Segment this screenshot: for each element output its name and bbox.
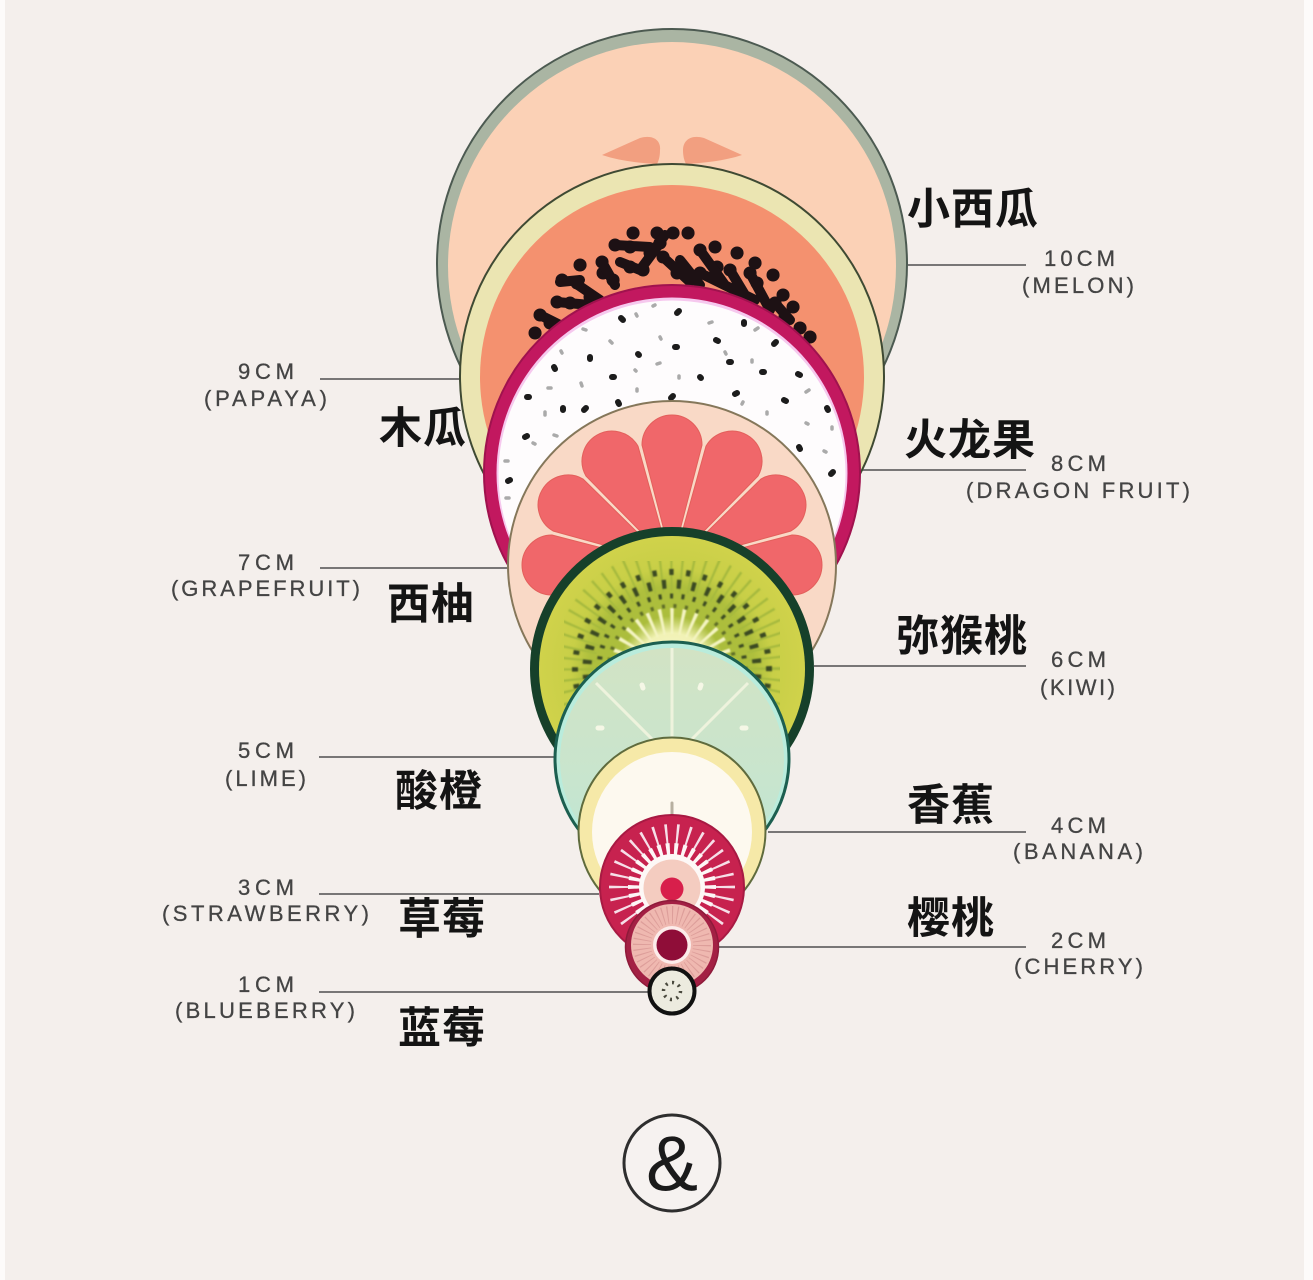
banana stem mark [670,803,674,814]
icon: ampersand logo: & [646,1119,698,1207]
label: lime [225,738,483,816]
label: strawberry [162,875,486,944]
label: kiwi: 弥猴桃 [896,613,1028,661]
label: dragon fruit [904,417,1190,503]
label: grapefruit [171,550,475,629]
label: melon: (MELON) [1022,273,1134,298]
label: dragon fruit: 火龙果 [904,417,1036,465]
kiwi seeds [575,572,769,766]
label: strawberry: 草莓 [398,896,486,944]
label: banana [907,782,1143,864]
fruit: cherry [626,900,718,994]
fruit: banana [578,738,766,924]
label: lime: (LIME) [225,766,306,791]
label: lime: 5CM [238,738,294,763]
leader lines [319,265,1026,992]
label: melon [907,186,1134,298]
label: kiwi: (KIWI) [1040,675,1115,700]
label: papaya: 9CM [238,359,294,384]
papaya seeds [535,233,810,337]
label: cherry: (CHERRY) [1014,954,1143,979]
fruit: kiwi [530,527,814,811]
strawberry rays [622,837,722,937]
fruit: blueberry [650,968,694,1014]
label: banana: 4CM [1051,813,1106,838]
label: cherry [907,895,1143,979]
lime pulp specks [598,685,746,728]
label: papaya [204,359,467,453]
label: blueberry: 蓝莓 [398,1005,486,1053]
label: melon: 小西瓜 [907,186,1039,234]
fruit: dragon fruit [484,285,860,661]
label: strawberry: (STRAWBERRY) [162,901,369,926]
grapefruit segments [522,415,822,595]
label: dragon fruit: (DRAGON FRUIT) [966,478,1190,503]
label: cherry: 2CM [1051,928,1106,953]
label: grapefruit: (GRAPEFRUIT) [171,576,360,601]
label: papaya: 木瓜 [379,405,467,453]
label: banana: 香蕉 [907,782,995,830]
fruit: lime [555,642,789,876]
kiwi spikes [574,571,770,767]
label: grapefruit: 7CM [238,550,294,575]
label: papaya: (PAPAYA) [204,386,327,411]
dragon fruit seeds [505,305,833,498]
label: grapefruit: 西柚 [387,581,475,629]
label: cherry: 樱桃 [907,895,995,943]
label: blueberry [175,972,486,1053]
fruit: strawberry [600,815,744,959]
label: melon: 10CM [1044,246,1115,271]
fruit: melon [437,29,907,499]
icon: ampersand logo [624,1115,720,1211]
label: kiwi [896,613,1115,700]
label: dragon fruit: 8CM [1051,451,1106,476]
fruit: grapefruit [508,401,836,729]
label: strawberry: 3CM [238,875,294,900]
lime segment lines [596,648,748,759]
label: banana: (BANANA) [1013,839,1143,864]
fruit: papaya [460,164,884,588]
label: kiwi: 6CM [1051,647,1106,672]
label: lime: 酸橙 [395,768,483,816]
melon seeds [602,137,742,164]
label: blueberry: 1CM [238,972,294,997]
label: blueberry: (BLUEBERRY) [175,998,355,1023]
